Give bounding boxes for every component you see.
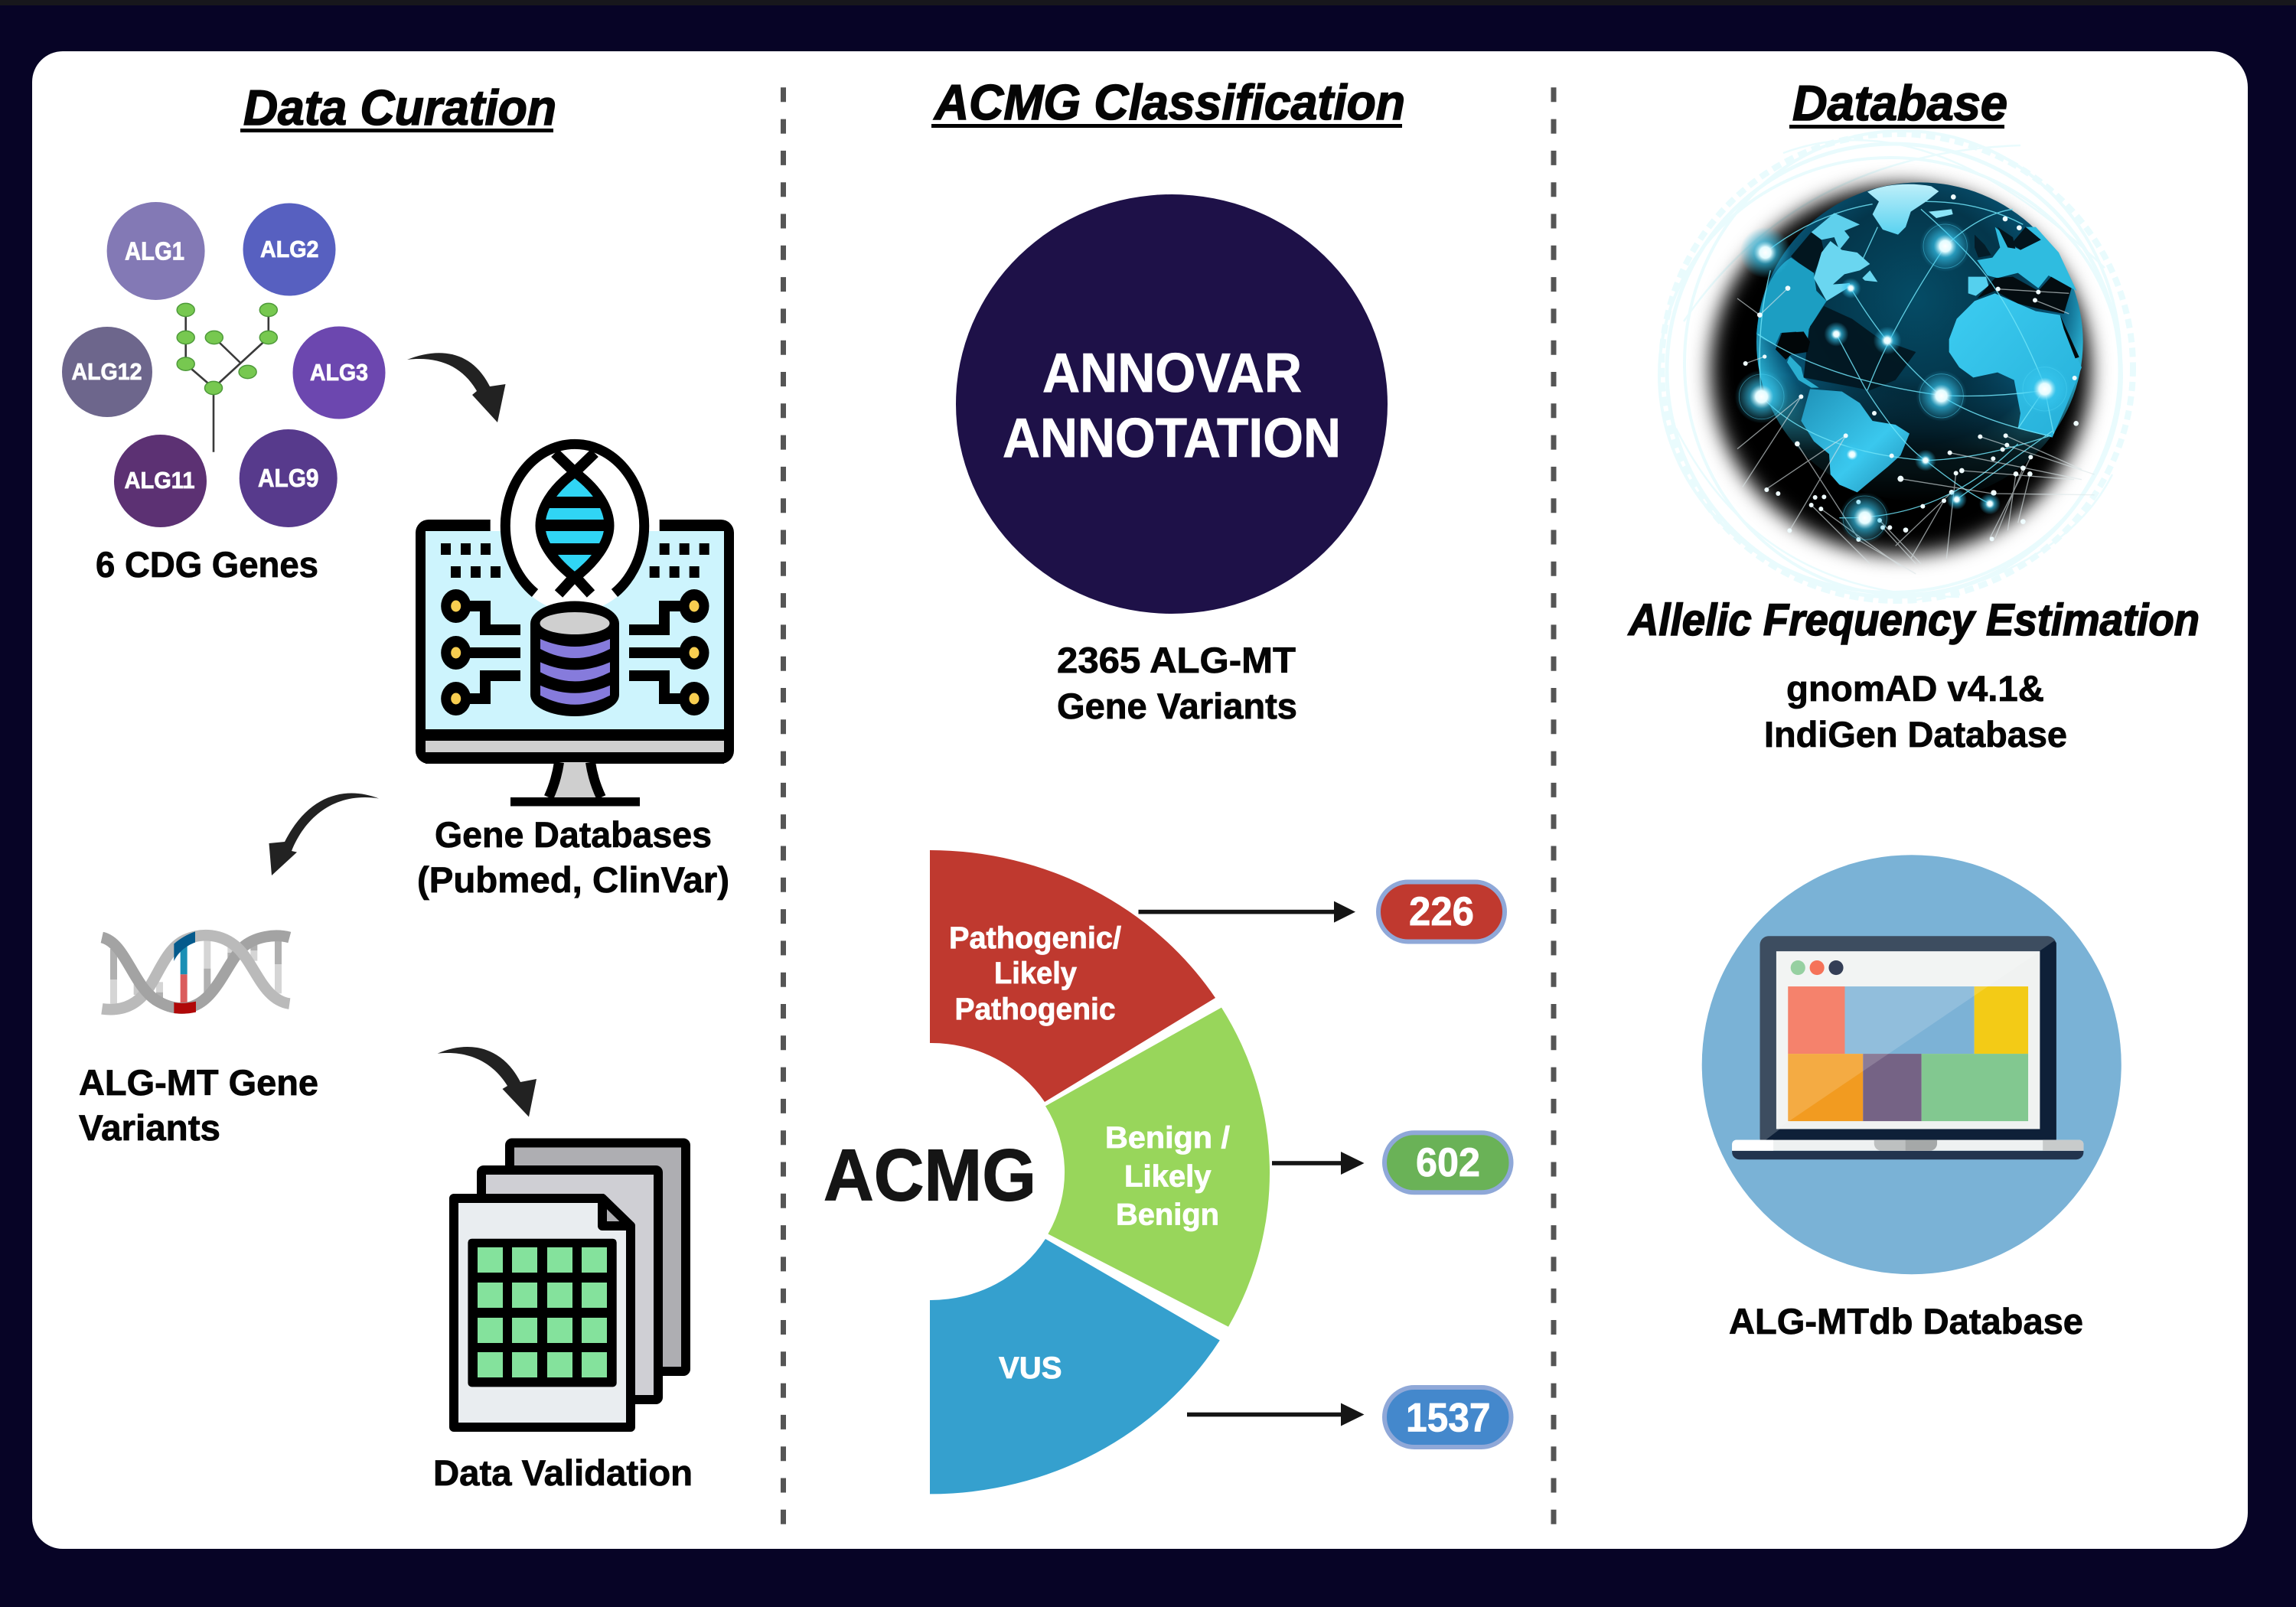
badge: 602: 602 <box>1416 1140 1480 1185</box>
gene circle ALG1 <box>107 202 205 300</box>
label: 2365 ALG-MT Gene Variants: Gene Variants <box>1057 686 1297 726</box>
label: ACMG: ACMG <box>823 1134 1036 1217</box>
arrow: VUS count <box>1187 1403 1364 1426</box>
dna helix <box>540 453 609 594</box>
connection arcs <box>1758 201 2053 518</box>
segment: VUS: VUS <box>999 1351 1062 1385</box>
ring <box>505 444 644 593</box>
gene circle ALG2 <box>243 204 335 295</box>
gene circle ALG11: ALG11 <box>124 467 194 494</box>
gene circle ALG12: ALG12 <box>72 358 142 385</box>
label: 6 CDG Genes: 6 CDG Genes <box>96 544 318 585</box>
badge: 1537 <box>1384 1387 1511 1447</box>
badge: 602 <box>1384 1133 1511 1192</box>
arrow: databases to variants <box>269 794 379 875</box>
shadow <box>1711 185 2091 555</box>
arrow: genes to databases <box>407 353 505 422</box>
segment: Benign / Likely Benign: Benign <box>1116 1198 1219 1231</box>
screen <box>426 531 724 729</box>
stand <box>510 762 640 807</box>
database cylinder <box>530 601 619 716</box>
glowing hubs <box>1735 220 2070 543</box>
label: Allelic Frequency Estimation: Allelic Frequency Estimation <box>1627 595 2200 645</box>
segment: Pathogenic / Likely Pathogenic <box>930 850 1215 1102</box>
label: Gene Databases <box>417 814 729 900</box>
network dots <box>1743 194 2079 542</box>
label: 2365 ALG-MT Gene Variants: 2365 ALG-MT <box>1057 640 1296 680</box>
icon: DNA double helix <box>102 931 289 1014</box>
laptop lid <box>1760 936 2056 1147</box>
circle: ANNOVAR annotation <box>956 194 1388 614</box>
laptop base <box>1732 1140 2083 1159</box>
segment: VUS <box>930 1239 1220 1494</box>
badge: 1537: 1537 <box>1406 1396 1491 1440</box>
icon: laptop in circle <box>1702 855 2122 1274</box>
icon: glowing globe <box>1659 131 2133 601</box>
arrow: pathogenic count <box>1139 901 1355 923</box>
label: gnomAD and IndiGen databases: IndiGen Database <box>1764 714 2067 755</box>
segment: Benign / Likely Benign: Likely <box>1124 1160 1212 1194</box>
circle: ANNOVAR annotation: ANNOVAR <box>1042 343 1302 404</box>
label: Data Validation: Data Validation <box>433 1452 693 1493</box>
gene circle ALG12 <box>62 327 152 417</box>
heading: Data Curation: Data Curation <box>243 80 556 135</box>
label: gnomAD and IndiGen databases: gnomAD v4.1& <box>1786 668 2044 709</box>
gene cluster: 6 CDG genes <box>62 202 386 585</box>
label: ALG-MT Gene Variants: Variants <box>79 1107 220 1148</box>
icon: data validation documents <box>454 1143 686 1427</box>
segment: Benign / Likely Benign <box>1045 1008 1270 1327</box>
network halo <box>1659 131 2133 601</box>
heading: Database: Database <box>1792 75 2007 131</box>
segment: Pathogenic / Likely Pathogenic: Pathogenic <box>955 993 1116 1026</box>
segment: Pathogenic / Likely Pathogenic: Likely <box>994 957 1078 990</box>
continents <box>1867 184 1939 235</box>
gene circle ALG2: ALG2 <box>260 236 318 262</box>
gene circle ALG9 <box>240 429 338 527</box>
heading: ACMG Classification: ACMG Classification <box>933 74 1405 130</box>
label: ALG-MTdb Database: ALG-MTdb Database <box>1729 1301 2083 1341</box>
label: Gene Databases: Gene Databases <box>435 814 712 855</box>
icon: monitor with DNA and database <box>416 439 734 807</box>
gene circle ALG9: ALG9 <box>258 464 318 492</box>
arrow: benign count <box>1272 1152 1364 1175</box>
gene circle ALG11 <box>114 435 207 527</box>
laptop screen <box>1776 951 2040 1129</box>
segment: Benign / Likely Benign: Benign / <box>1105 1121 1230 1155</box>
gene circle ALG3: ALG3 <box>310 359 368 386</box>
segment: Pathogenic / Likely Pathogenic: Pathogenic/ <box>949 921 1121 955</box>
label: Gene Databases: (Pubmed, ClinVar) <box>417 859 729 900</box>
badge: 226 <box>1378 882 1505 941</box>
label: ALG-MT Gene Variants: ALG-MT Gene <box>79 1062 318 1103</box>
gene circle ALG1: ALG1 <box>125 237 184 265</box>
label: gnomAD and IndiGen databases <box>1764 668 2067 755</box>
gene circle ALG3 <box>292 326 386 419</box>
fibre lines <box>1737 288 2095 574</box>
label: 2365 ALG-MT Gene Variants <box>1057 640 1297 726</box>
badge: 226: 226 <box>1409 889 1474 934</box>
sphere <box>1756 182 2083 501</box>
arrow: variants to validation <box>438 1047 536 1117</box>
circle: ANNOVAR annotation: ANNOTATION <box>1003 408 1341 469</box>
label: ALG-MT Gene Variants <box>79 1062 318 1148</box>
circuit traces <box>459 606 690 699</box>
chart: ACMG fan <box>823 850 1270 1494</box>
indicator squares <box>441 543 709 578</box>
icon: glycan tree <box>177 303 277 452</box>
